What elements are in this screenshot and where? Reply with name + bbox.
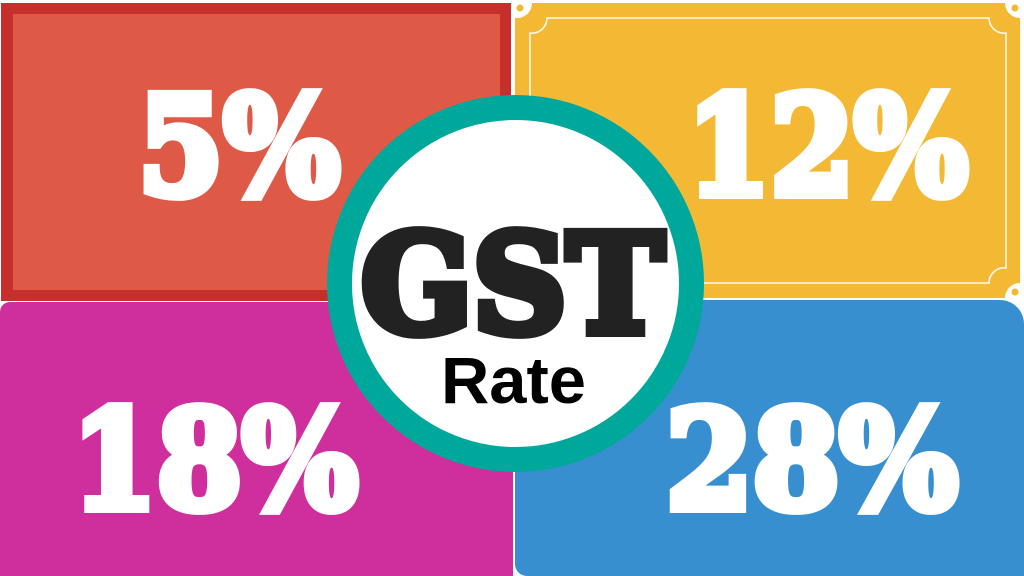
text: Rate: Rate — [441, 343, 586, 417]
text: 12%: 12% — [687, 67, 968, 227]
text: 5%: 5% — [138, 67, 340, 227]
heading: GST: GST — [361, 205, 664, 365]
panel: 28% — [515, 300, 1024, 576]
teal ring — [340, 108, 692, 460]
text: 18%: 18% — [72, 381, 358, 541]
panel: 12% — [515, 3, 1020, 298]
center badge — [340, 108, 692, 460]
panel: 5% — [1, 3, 511, 301]
panel: 18% — [0, 302, 513, 576]
text: 28%: 28% — [666, 381, 958, 541]
